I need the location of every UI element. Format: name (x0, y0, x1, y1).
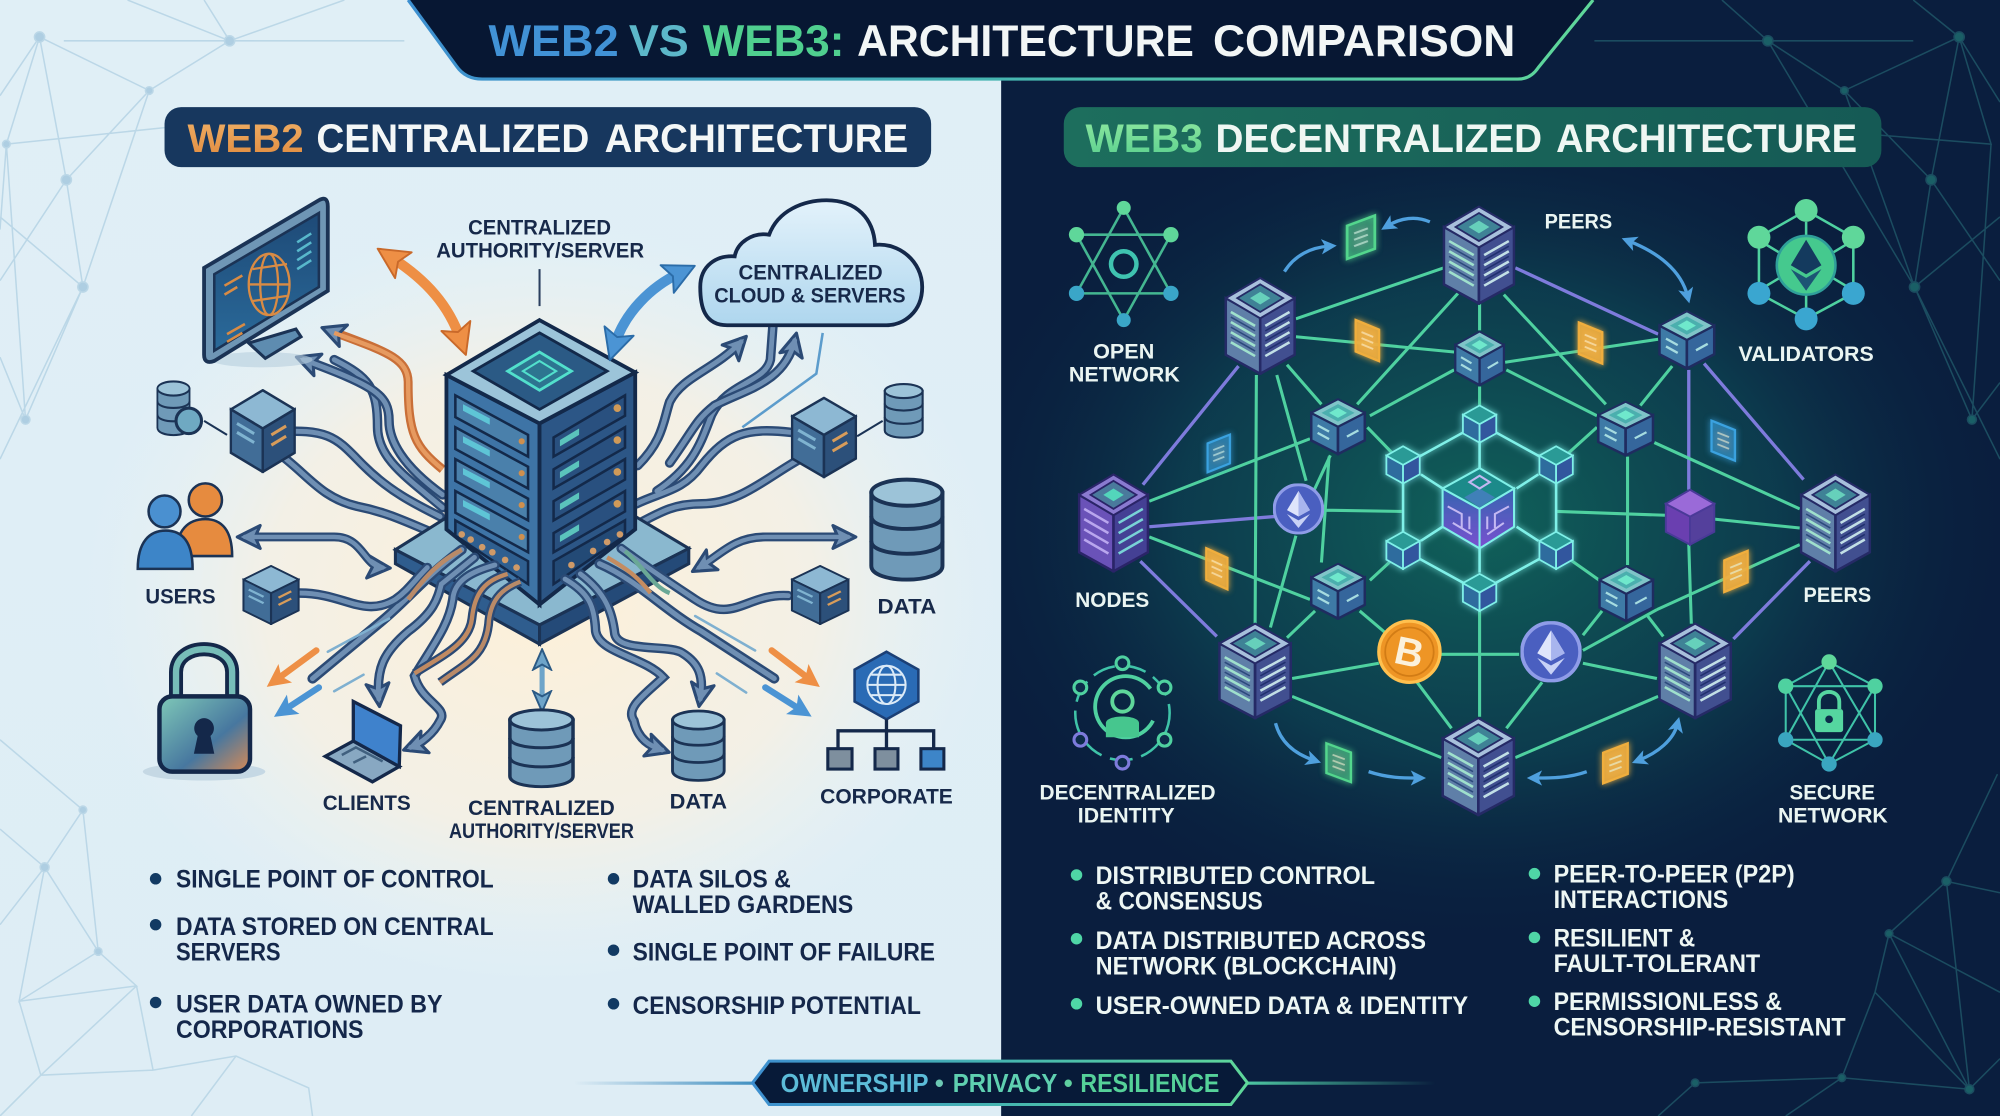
icon: centralized cloud (700, 200, 922, 325)
bullet: distributed control and consensus (1071, 862, 1375, 915)
server nodes (1079, 207, 1870, 815)
icon: data database (673, 711, 724, 780)
label: centralized authority/server top (436, 217, 644, 263)
central block cube (1443, 468, 1514, 548)
leader line to label (539, 269, 541, 306)
label: validators: VALIDATORS (1739, 343, 1874, 366)
icon: laptop (325, 701, 401, 782)
icon: decentralized identity (1074, 657, 1171, 769)
bullet: peer-to-peer interactions: INTERACTIONS (1554, 886, 1728, 914)
heading: Web2 centralized architecture: ARCHITECTURE (605, 117, 908, 161)
bullet: data distributed across network (1071, 927, 1426, 980)
bullet: distributed control and consensus: & CONSENSUS (1096, 887, 1263, 915)
label: clients: CLIENTS (323, 792, 411, 815)
bullet: single point of failure: SINGLE POINT OF FAILURE (633, 938, 935, 966)
list: Web2 left column (150, 866, 494, 1044)
title banner (408, 0, 1593, 79)
teal glow behind network (1062, 193, 1898, 854)
list: Web2 right column (608, 866, 935, 1020)
bullet: distributed control and consensus: DISTRIBUTED CONTROL (1096, 862, 1375, 890)
label: corporate: CORPORATE (820, 786, 953, 809)
icon: small cube left (243, 566, 299, 624)
icon: small database upper right (885, 384, 923, 438)
icon: small database upper left (157, 381, 202, 435)
bullet: permissionless and censorship-resistant: CENSORSHIP-RESISTANT (1554, 1014, 1846, 1042)
icon: ethereum coin right (1522, 623, 1580, 681)
footer banner: PRIVACY (953, 1070, 1057, 1098)
label: secure network: SECURE (1790, 782, 1875, 805)
label: centralized cloud and servers (714, 261, 906, 307)
central server tower (446, 320, 635, 605)
bullet: data distributed across network: DATA DISTRIBUTED ACROSS (1096, 927, 1426, 955)
bullet: data silos and walled gardens (608, 866, 853, 919)
footer banner: OWNERSHIP (781, 1070, 929, 1098)
mesh lines: purple (1140, 268, 1810, 639)
footer banner (574, 1061, 1436, 1105)
upper connection wires (245, 325, 848, 568)
icon: server box upper left (204, 390, 295, 472)
bullet: censorship potential: CENSORSHIP POTENTIAL (633, 992, 921, 1020)
heading: Web2 centralized architecture (165, 107, 931, 167)
bullet: resilient and fault-tolerant: FAULT-TOLERANT (1554, 950, 1760, 978)
arrow: orange server to monitor (392, 258, 460, 339)
label: open network: NETWORK (1069, 363, 1180, 386)
bullet: data silos and walled gardens: DATA SILOS & (633, 866, 791, 894)
icon: padlock (143, 649, 265, 781)
list: Web3 right column (1529, 861, 1846, 1042)
central blockchain hexagon (1386, 405, 1573, 611)
title text (489, 17, 1515, 66)
mesh lines: green (1149, 268, 1800, 758)
icon: server box upper right (792, 398, 883, 477)
label: decentralized identity: DECENTRALIZED (1040, 782, 1216, 805)
bullet: permissionless and censorship-resistant (1529, 988, 1846, 1042)
footer banner: • (935, 1070, 944, 1098)
bullet: data distributed across network: NETWORK (BLOCKCHAIN) (1096, 952, 1397, 980)
bullet: peer-to-peer interactions (1529, 861, 1795, 914)
lower connection wires (300, 548, 788, 750)
label: centralized authority/server bottom: AUTHORITY/SERVER (449, 820, 634, 843)
purple node (1666, 490, 1714, 545)
title text: ARCHITECTURE (857, 17, 1194, 66)
icon: users (138, 483, 232, 569)
title text: VS (629, 17, 689, 66)
server platform (395, 459, 689, 644)
bullet: resilient and fault-tolerant: RESILIENT & (1554, 924, 1695, 952)
footer banner: RESILIENCE (1080, 1070, 1219, 1098)
icon: small cube right (792, 566, 848, 624)
label: peers right: PEERS (1804, 584, 1871, 607)
curved flow arrows (1276, 218, 1688, 778)
icon: open network (1069, 201, 1179, 327)
heading: Web3 decentralized architecture (1064, 107, 1881, 167)
diagram: Web3 decentralized mesh (1079, 207, 1870, 815)
label: data bottom: DATA (670, 791, 727, 814)
heading: Web3 decentralized architecture: WEB3 (1085, 117, 1203, 161)
label: open network: OPEN (1093, 340, 1154, 363)
icon: ethereum coin left (1274, 485, 1323, 533)
icon: central database (510, 710, 573, 787)
bullet: peer-to-peer interactions: PEER-TO-PEER (P2P) (1554, 861, 1795, 889)
icon: monitor with globe (204, 199, 328, 367)
heading: Web2 centralized architecture: CENTRALIZED (316, 117, 589, 161)
label: secure network (1778, 782, 1888, 828)
label: centralized cloud and servers: CLOUD & SERVERS (714, 284, 906, 307)
title text: WEB2 (489, 17, 619, 66)
bullet: single point of control: SINGLE POINT OF CONTROL (176, 866, 494, 894)
heading: Web3 decentralized architecture: ARCHITECTURE (1556, 117, 1857, 161)
label: centralized authority/server top: CENTRALIZED (468, 217, 611, 240)
bullet: user data owned by corporations: CORPORATIONS (176, 1016, 364, 1044)
title text: COMPARISON (1213, 17, 1515, 66)
icon: validators (1747, 199, 1865, 330)
bullet: resilient and fault-tolerant (1529, 924, 1760, 978)
icon: large database (871, 480, 942, 580)
bullet: user data owned by corporations: USER DATA OWNED BY (176, 991, 443, 1019)
title text: WEB3: (703, 17, 844, 66)
bullet: data stored on central servers (150, 913, 494, 966)
small cube nodes (1311, 311, 1714, 621)
label: data right: DATA (878, 595, 936, 618)
label: open network (1069, 340, 1180, 386)
bullet: data silos and walled gardens: WALLED GARDENS (633, 891, 853, 919)
label: peers top: PEERS (1545, 210, 1612, 233)
documents (1206, 216, 1748, 783)
icon: corporate hierarchy (828, 652, 944, 769)
label: decentralized identity: IDENTITY (1078, 805, 1175, 828)
icon: secure network (1778, 654, 1883, 772)
label: decentralized identity (1040, 782, 1216, 828)
label: centralized authority/server bottom (449, 797, 634, 843)
heading: Web3 decentralized architecture: DECENTRALIZED (1216, 117, 1542, 161)
bullet: data stored on central servers: DATA STORED ON CENTRAL (176, 913, 494, 941)
background: Web3 dark panel (1001, 0, 2000, 1116)
label: users: USERS (145, 585, 216, 608)
background: Web2 light panel (0, 0, 1001, 1116)
label: centralized authority/server top: AUTHORITY/SERVER (436, 240, 644, 263)
warm glow behind central server (182, 303, 901, 900)
list: Web3 left column (1071, 862, 1469, 1020)
label: secure network: NETWORK (1778, 805, 1888, 828)
bullet: permissionless and censorship-resistant: PERMISSIONLESS & (1554, 988, 1782, 1016)
icon: bitcoin coin (1379, 621, 1440, 682)
accent arrows (278, 616, 809, 709)
label: nodes: NODES (1075, 589, 1149, 612)
footer banner: • (1064, 1070, 1073, 1098)
label: centralized cloud and servers: CENTRALIZED (739, 261, 883, 284)
arrow: centre vertical (540, 659, 544, 701)
bullet: data stored on central servers: SERVERS (176, 938, 281, 966)
icon: bitcoin coin: B (1391, 628, 1428, 677)
arrow: blue server to cloud (615, 273, 680, 344)
label: centralized authority/server bottom: CENTRALIZED (468, 797, 615, 820)
diagram: Web2 centralized hub (245, 258, 848, 750)
bullet: user-owned data and identity: USER-OWNED DATA & IDENTITY (1096, 992, 1469, 1020)
heading: Web2 centralized architecture: WEB2 (188, 117, 304, 161)
bullet: user data owned by corporations (150, 991, 443, 1044)
